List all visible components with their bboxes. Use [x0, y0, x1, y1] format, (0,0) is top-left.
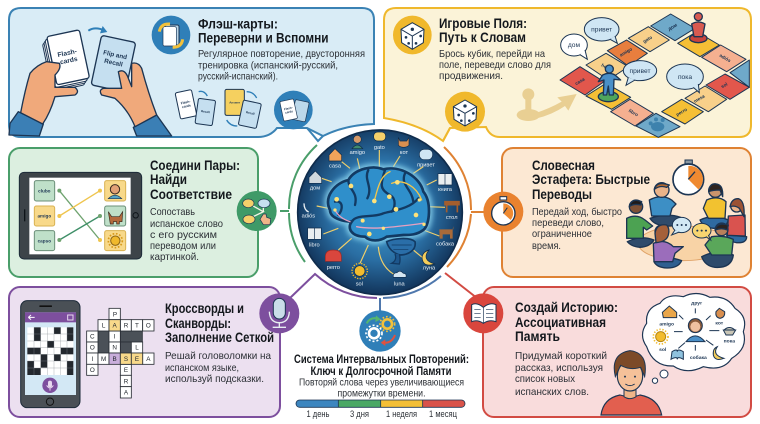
word labels: собака — [436, 242, 455, 248]
description — [150, 207, 223, 263]
word labels — [302, 145, 458, 288]
title — [165, 301, 274, 345]
title — [198, 16, 328, 46]
description — [532, 206, 622, 252]
illustration: hands holding cards: Flash- — [57, 48, 78, 59]
title: Переводы — [532, 187, 592, 202]
word labels: gato — [374, 145, 385, 151]
title: Словесная — [532, 158, 595, 173]
icon: flip cards circle — [152, 16, 190, 54]
timeline labels: 1 день — [306, 409, 330, 420]
illustration: thought cloud: собака — [690, 354, 707, 361]
title: Система Интервальных Повторений: — [294, 352, 469, 366]
description: Решай головоломки на — [165, 351, 271, 362]
title: Сканворды: — [165, 316, 231, 331]
illustration: crossword grid: B — [113, 356, 117, 363]
panel: board games — [384, 8, 751, 141]
illustration: thought cloud: пока — [724, 338, 735, 344]
illustration: crossword grid: L — [135, 345, 139, 352]
illustration: crossword grid: O — [146, 323, 151, 330]
description: русский-испанский). — [198, 72, 278, 82]
illustration: crossword grid: O — [90, 345, 95, 352]
illustration: crossword grid: L — [102, 323, 106, 330]
word labels: casa — [329, 163, 342, 169]
word labels: привет — [417, 162, 435, 168]
word labels: стол — [446, 215, 458, 221]
description: с его русским — [150, 230, 217, 241]
title: Ключ к Долгосрочной Памяти — [310, 364, 452, 378]
icon: matching circle — [237, 191, 277, 231]
illustration: tablet with matching game: capso — [38, 238, 51, 243]
description: список новых — [515, 374, 576, 385]
description: испанских слов. — [515, 387, 589, 398]
illustration: crossword grid: I — [91, 356, 93, 363]
timeline bar — [296, 400, 465, 407]
title — [439, 16, 527, 45]
illustration: game board: amigo — [619, 46, 633, 58]
title: Ассоциативная — [515, 315, 606, 330]
description: испанское слово — [150, 219, 223, 230]
illustration: crossword grid: T — [135, 323, 139, 330]
title — [150, 158, 240, 202]
panel: crosswords — [9, 287, 280, 417]
illustration: hands holding cards — [9, 26, 172, 136]
illustration: small flip cards: Recall — [201, 109, 210, 114]
description: используй подсказки. — [165, 374, 264, 385]
description — [165, 351, 271, 385]
illustration: crossword grid: E — [135, 356, 139, 363]
illustration: game board — [517, 13, 749, 137]
title: Игровые Поля: — [439, 16, 527, 31]
title — [294, 352, 469, 378]
title: Переверни и Вспомни — [198, 30, 328, 46]
title — [515, 300, 618, 344]
illustration: game board: привет — [629, 68, 651, 75]
icon: red pawn — [690, 13, 707, 43]
word labels: кот — [400, 150, 408, 156]
illustration: game board: sol — [720, 82, 728, 89]
illustration: small flip cards: Answer — [229, 100, 241, 104]
illustration: crossword grid: R — [124, 323, 129, 330]
illustration: crossword grid: P — [113, 312, 117, 319]
word labels: adiós — [302, 214, 315, 220]
illustration: crossword grid: O — [90, 367, 95, 374]
icon: small cards circle — [274, 91, 313, 129]
illustration: hands holding cards: Flip and — [102, 49, 128, 61]
illustration: crossword grid: A — [113, 323, 118, 330]
icon: ghost pawn and arrow — [517, 88, 577, 121]
central brain disc with vocabulary icons — [298, 130, 462, 295]
word labels: sol — [356, 282, 363, 288]
icon: big stopwatch — [673, 160, 704, 195]
description: Передай ход, быстро — [532, 206, 622, 218]
illustration: crossword grid: R — [124, 378, 129, 385]
illustration: game board: пока — [678, 74, 692, 81]
illustration: game board: дом — [667, 22, 679, 33]
illustration: thought cloud — [642, 293, 745, 383]
illustration: game board: hola — [600, 62, 611, 72]
title: Соедини Пары: — [150, 158, 240, 173]
title — [532, 158, 650, 202]
title: Флэш-карты: — [198, 16, 278, 32]
icon: open book circle — [463, 293, 503, 333]
illustration: tablet with matching game — [19, 172, 142, 259]
illustration: crossword grid: S — [124, 356, 128, 363]
illustration: thought cloud: друг — [691, 300, 702, 306]
title: Кроссворды и — [165, 301, 244, 316]
timeline labels: 3 дня — [350, 409, 369, 420]
panel: create a story — [483, 287, 751, 417]
description: испанском языке, — [165, 363, 239, 374]
illustration: game board: mesa — [693, 93, 706, 104]
speech bubbles — [561, 18, 703, 93]
word labels: luna — [394, 282, 406, 288]
panel: flash cards — [9, 8, 374, 137]
title: Создай Историю: — [515, 300, 618, 315]
illustration: people in a circle with stopwatch — [627, 160, 747, 268]
illustration: game board: perro — [675, 107, 688, 117]
illustration: small flip cards: cards — [182, 103, 191, 109]
icon: gears circle — [359, 310, 401, 352]
description: картинкой. — [150, 252, 199, 263]
description — [439, 48, 551, 82]
title: Путь к Словам — [439, 30, 526, 45]
title: Заполнение Сеткой — [165, 330, 274, 345]
description: время. — [532, 241, 561, 252]
panel: spaced repetition — [294, 310, 469, 420]
illustration: phone with crossword — [21, 301, 80, 408]
icon: microphone circle — [259, 293, 299, 333]
description: продвижения. — [439, 71, 503, 82]
description: рассказ, используя — [515, 363, 603, 374]
illustration: game board: casa — [574, 76, 586, 86]
title: Эстафета: Быстрые — [532, 172, 650, 187]
description: переведи слово, — [532, 218, 604, 229]
illustration: crossword grid: A — [124, 390, 129, 397]
illustration: crossword grid: N — [112, 345, 117, 352]
word labels: libro — [309, 242, 320, 248]
vocabulary icons — [304, 132, 459, 279]
description: Брось кубик, перейди на — [439, 48, 545, 60]
description: тренировка (испанский-русский, — [198, 60, 338, 72]
description: поле, переведи слово для — [439, 60, 551, 71]
illustration: hands holding cards: cards — [60, 56, 79, 66]
description: Повторяй слова через увеличивающиеся — [299, 378, 464, 388]
illustration: thinking man — [601, 351, 662, 415]
description: ограниченное — [532, 229, 592, 240]
illustration: crossword grid: M — [101, 356, 106, 363]
illustration: hands holding cards: Recall — [104, 58, 123, 69]
illustration: thought cloud: sol — [659, 347, 667, 353]
rays to words — [317, 150, 445, 275]
description: промежутки времени. — [338, 388, 426, 400]
illustration: small flip cards — [175, 89, 261, 129]
illustration: thought cloud: кот — [715, 320, 724, 326]
timeline labels — [306, 409, 457, 420]
timeline labels: 1 неделя — [386, 409, 417, 420]
description: переводом или — [150, 241, 216, 252]
panel: word relay — [502, 148, 751, 277]
description: Регулярное повторение, двусторонняя — [198, 49, 365, 60]
illustration: game board: gato — [642, 35, 653, 44]
icon: small cards circle: Flash- — [284, 105, 293, 111]
illustration: tablet with matching game: amigo — [37, 214, 51, 219]
title: Найди — [150, 172, 187, 187]
brain — [328, 168, 429, 264]
word labels: perro — [327, 265, 340, 271]
illustration: small flip cards: Flash- — [180, 99, 191, 105]
description — [515, 351, 607, 398]
description: Придумай короткий — [515, 351, 607, 362]
description: Сопоставь — [150, 207, 195, 218]
icon: dice circle — [393, 16, 432, 54]
timeline labels: 1 месяц — [429, 409, 457, 420]
illustration: game board: дом — [568, 42, 580, 49]
illustration: crossword grid — [87, 308, 154, 398]
illustration: crossword grid: C — [90, 334, 95, 341]
description — [198, 49, 365, 82]
word labels: книга — [438, 187, 453, 193]
illustration: small flip cards: Recall — [246, 110, 255, 116]
illustration: game board: libro — [628, 108, 639, 117]
title: Память — [515, 329, 560, 344]
illustration: thought cloud: amigo — [659, 322, 674, 328]
description — [299, 378, 464, 400]
icon: stopwatch circle — [483, 192, 523, 232]
word labels: луна — [423, 266, 436, 272]
panel: matching pairs — [9, 148, 258, 277]
illustration: tablet with matching game: clubo — [38, 188, 51, 193]
word labels: amigo — [350, 150, 365, 156]
illustration: game board: adiós — [719, 53, 732, 63]
icon: small cards circle: cards — [285, 109, 294, 115]
icon: small dice circle — [445, 92, 485, 132]
title: Соответствие — [150, 187, 232, 202]
word labels: дом — [310, 186, 320, 192]
connector ring around the brain — [280, 128, 484, 312]
illustration: crossword grid: A — [146, 356, 151, 363]
icon: blue pawn — [598, 65, 621, 102]
illustration: crossword grid: E — [124, 367, 128, 374]
illustration: crossword grid: I — [114, 334, 116, 341]
illustration: game board: привет — [591, 26, 612, 33]
